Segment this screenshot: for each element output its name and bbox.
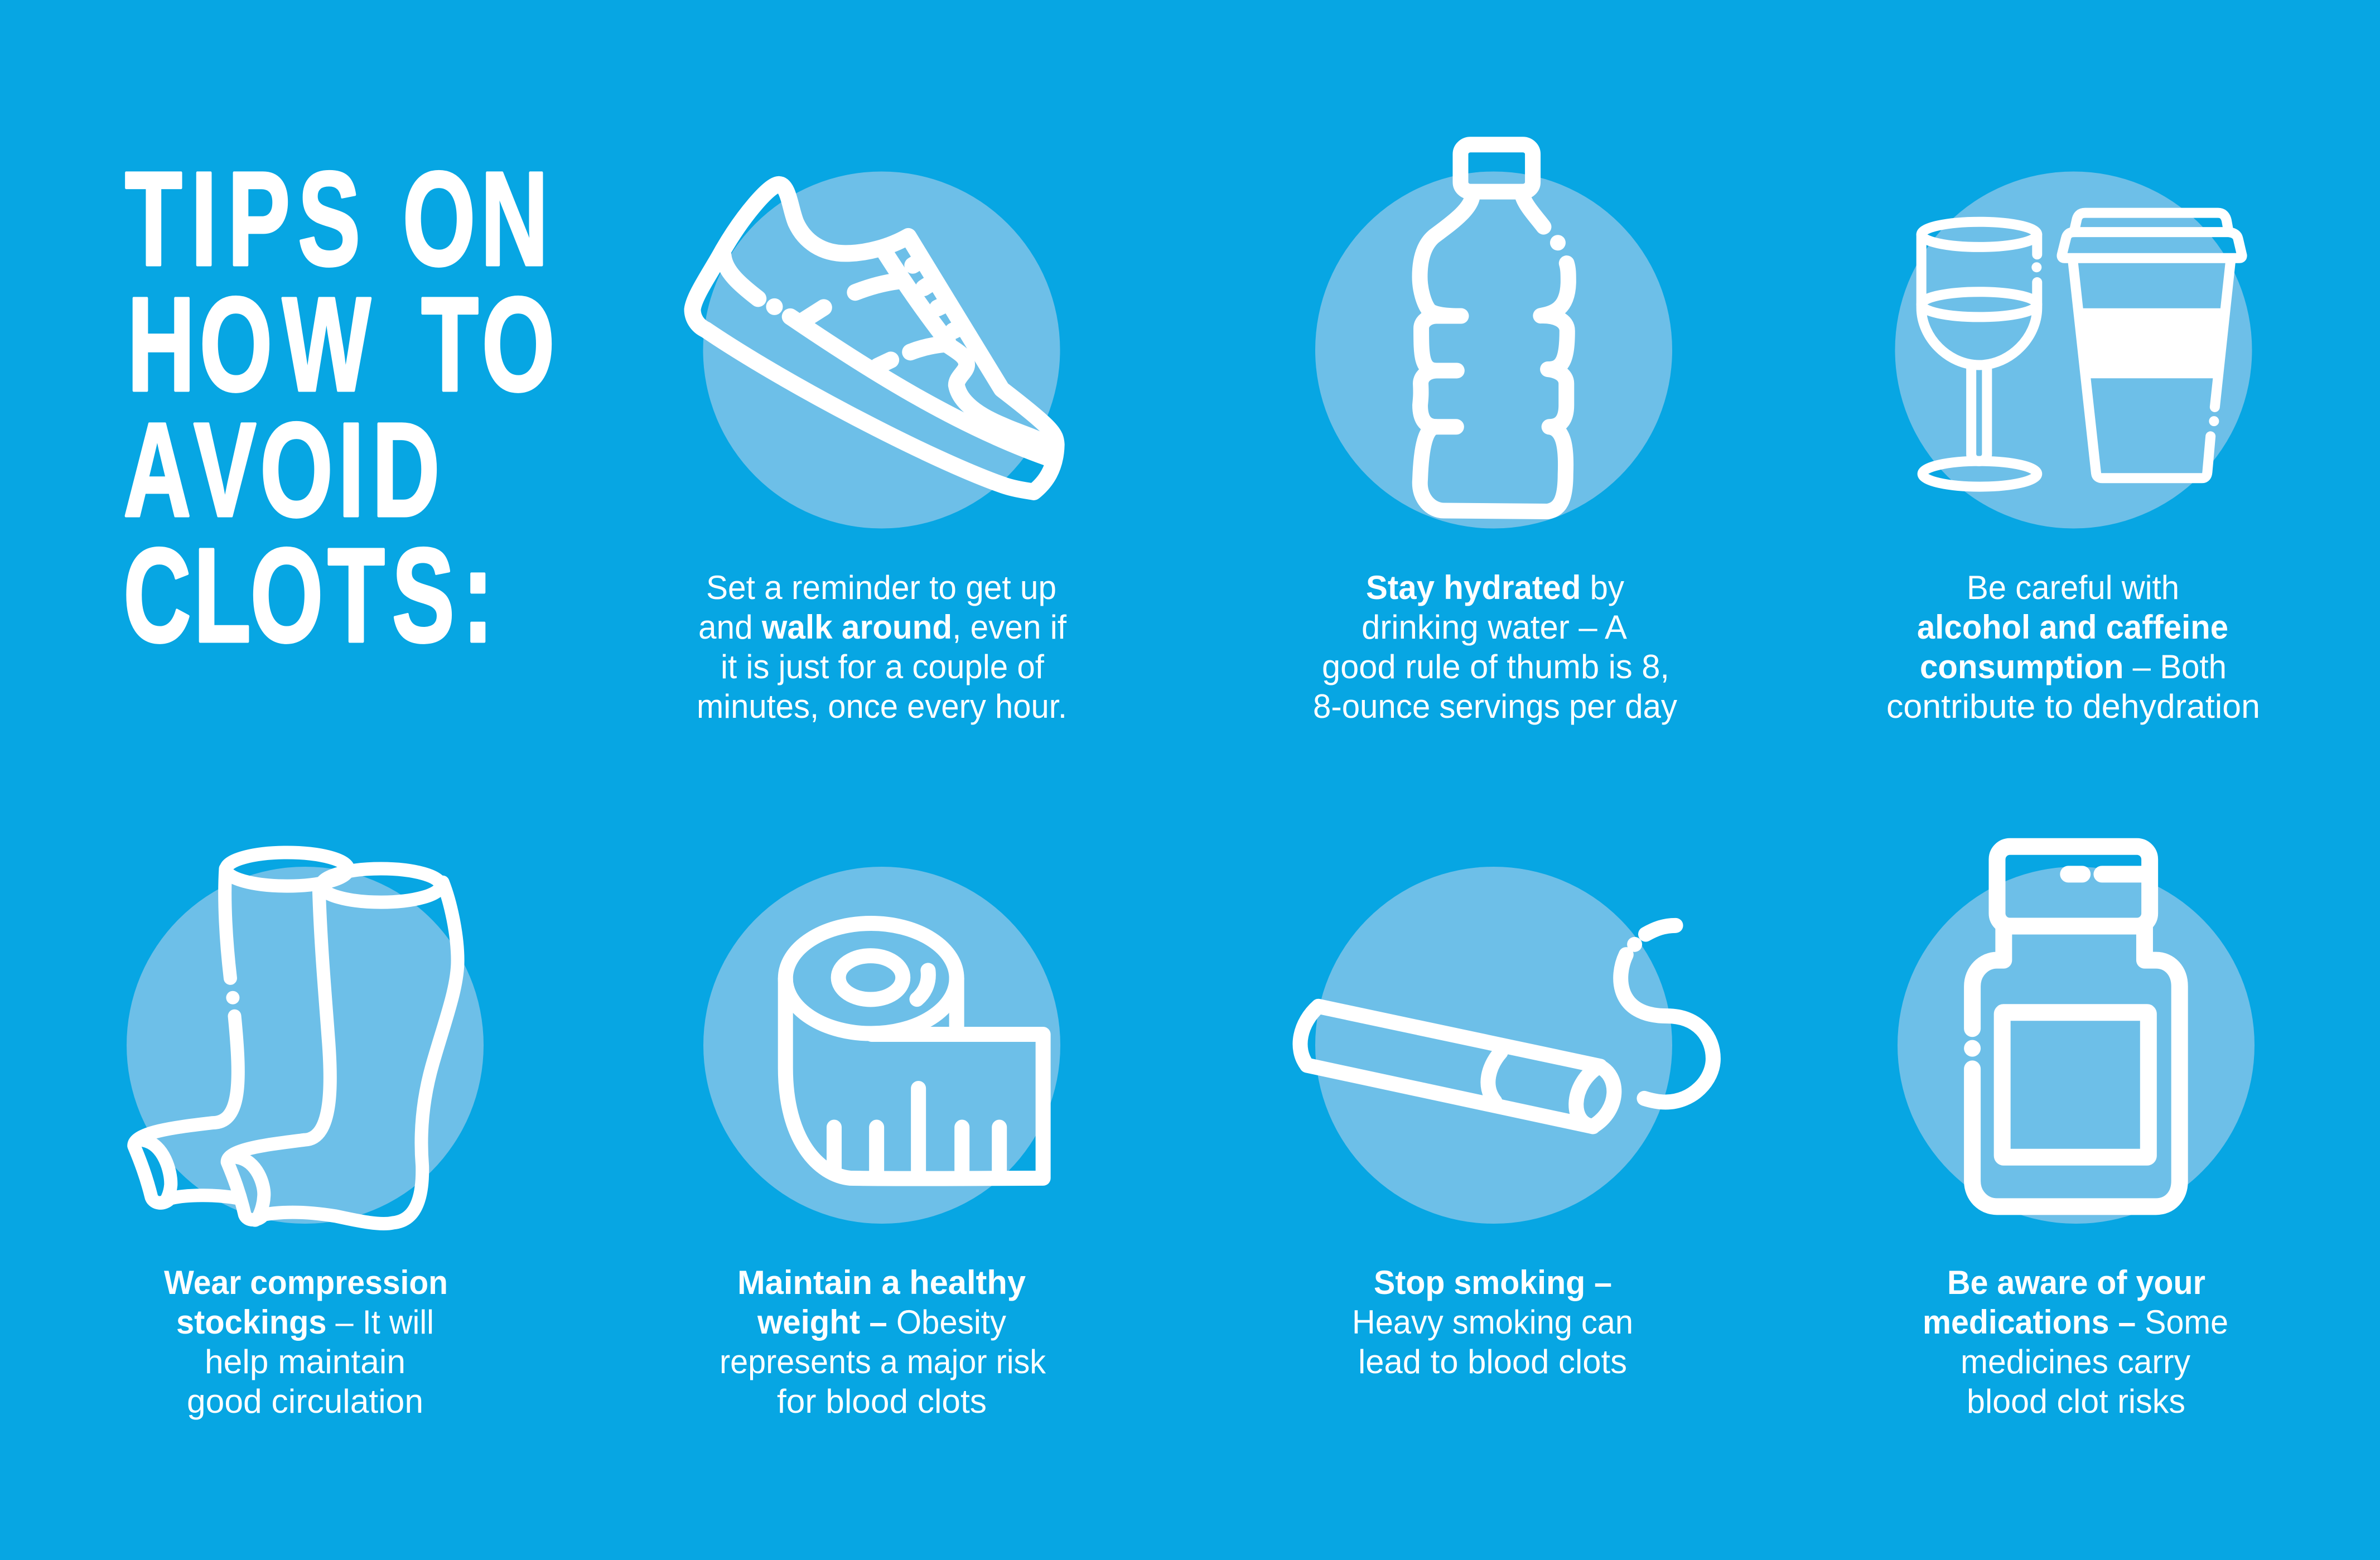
title: TIPS ON [125,144,548,293]
panel: healthy weight [703,867,1060,1420]
text: walk around [697,569,1067,725]
text: walk around: Set a reminder to get up [706,569,1056,606]
circle: tape backdrop [703,867,1060,1224]
title: CLOTS: [123,520,494,670]
text: alcohol and caffeine: contribute to dehydration [1886,688,2260,725]
icon: measuring tape [785,923,1043,1179]
text: alcohol and caffeine: consumption – Both [1920,648,2227,685]
text: alcohol and caffeine: Be careful with [1967,569,2179,606]
text: stop smoking: lead to blood clots [1358,1343,1627,1380]
title [123,144,554,670]
icon: shoe [693,185,1056,492]
panel: alcohol and caffeine [1886,172,2260,725]
text: compression stockings: Wear compression [164,1264,448,1301]
panel: compression stockings [127,852,484,1420]
text: medications: medications – Some [1923,1303,2228,1341]
text: alcohol and caffeine [1886,569,2260,725]
icon: wine glass [1922,222,2037,487]
icon: stockings [134,852,458,1224]
icon: cigarette [1300,925,1713,1127]
text: walk around: minutes, once every hour. [697,688,1067,725]
title: AVOID [123,395,440,544]
text: stay hydrated: good rule of thumb is 8, [1322,648,1669,685]
text: medications: medicines carry [1961,1343,2190,1380]
text: walk around: it is just for a couple of [721,648,1044,685]
circle: drinks backdrop [1895,172,2252,529]
text: stop smoking [1352,1264,1633,1380]
text: walk around: and walk around, even if [698,608,1066,646]
text: compression stockings: good circulation [187,1383,423,1420]
circle: shoe backdrop [703,172,1060,529]
text: stay hydrated: 8-ounce servings per day [1313,688,1677,725]
panel: stay hydrated [1313,144,1677,725]
text: compression stockings: stockings – It will [176,1303,434,1341]
text: healthy weight: represents a major risk [720,1343,1046,1380]
text: healthy weight [720,1264,1046,1420]
panel: medications [1898,847,2255,1420]
text: stay hydrated: drinking water – A [1362,608,1627,646]
text: stop smoking: Heavy smoking can [1352,1303,1633,1341]
panel: stop smoking [1300,867,1713,1380]
text: alcohol and caffeine: alcohol and caffeine [1917,608,2228,646]
text: medications: blood clot risks [1967,1383,2185,1420]
icon: medicine jar [1972,847,2180,1206]
icon: coffee cup [2062,213,2242,478]
text: healthy weight: for blood clots [777,1383,987,1420]
text: compression stockings [164,1264,448,1420]
text: compression stockings: help maintain [205,1343,405,1380]
text: stop smoking: Stop smoking – [1374,1264,1612,1301]
title: HOW TO [127,269,554,419]
text: medications [1923,1264,2228,1420]
text: medications: Be aware of your [1947,1264,2205,1301]
text: stay hydrated [1313,569,1677,725]
circle: bottle backdrop [1898,867,2255,1224]
text: stay hydrated: Stay hydrated by [1366,569,1624,606]
circle: cigarette backdrop [1315,867,1672,1224]
text: healthy weight: Maintain a healthy [737,1264,1026,1301]
panel: walk around [693,172,1067,725]
circle: stockings backdrop [127,867,484,1224]
circle: bottle backdrop [1315,172,1672,529]
text: healthy weight: weight – Obesity [757,1303,1006,1341]
icon: water bottle [1420,144,1568,511]
